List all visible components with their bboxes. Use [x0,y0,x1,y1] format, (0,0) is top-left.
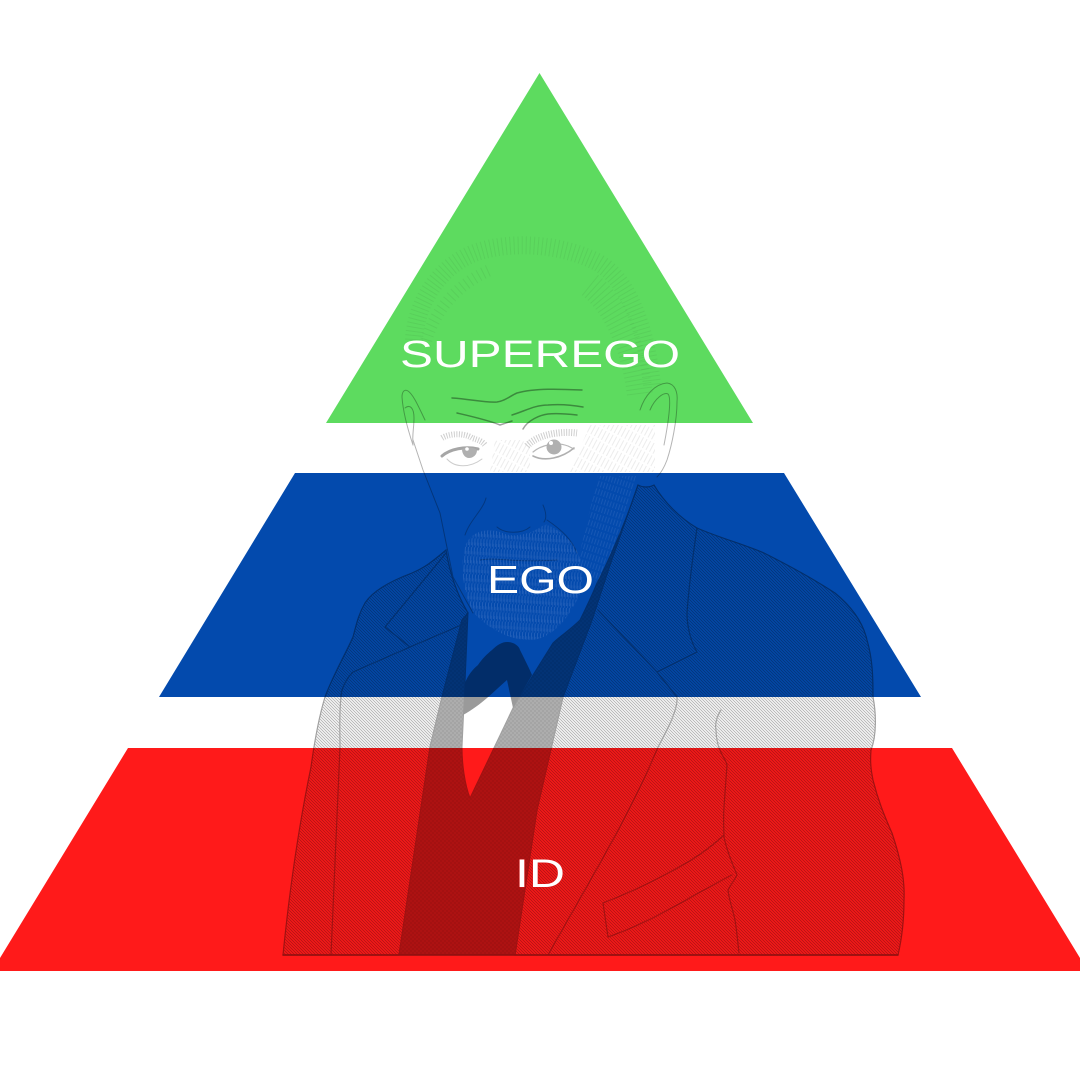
pyramid tier: superego [326,73,753,423]
ear: left [402,390,473,613]
beard and cheek hatching [462,476,636,640]
label: ego: EGO [487,559,594,602]
skin shading [490,425,655,472]
illustration: Sigmund Freud portrait overlay [283,245,904,955]
jacket: right side [515,485,904,955]
eye: right [533,440,574,459]
nose and mouth lines [465,498,577,561]
forehead wrinkles [452,389,583,429]
hair hatching [414,245,652,395]
ear: right [640,383,677,477]
jacket: left side [283,550,468,955]
pyramid tier: id [0,748,1080,971]
pyramid tier: ego [159,473,921,697]
jacket hem [283,954,898,956]
right eyebrow [527,432,577,446]
label: id: ID [515,852,565,896]
coat front band [399,485,638,955]
jacket seams: left lapel and front [331,553,466,955]
beard [462,524,583,640]
label: superego: SUPEREGO [400,334,680,376]
jacket pocket flap [603,835,732,937]
right cheek [578,476,636,583]
jacket seams: right lapel and arm [548,528,739,955]
necktie [463,642,532,715]
left eyebrow [442,434,485,445]
eye: left [442,447,482,466]
